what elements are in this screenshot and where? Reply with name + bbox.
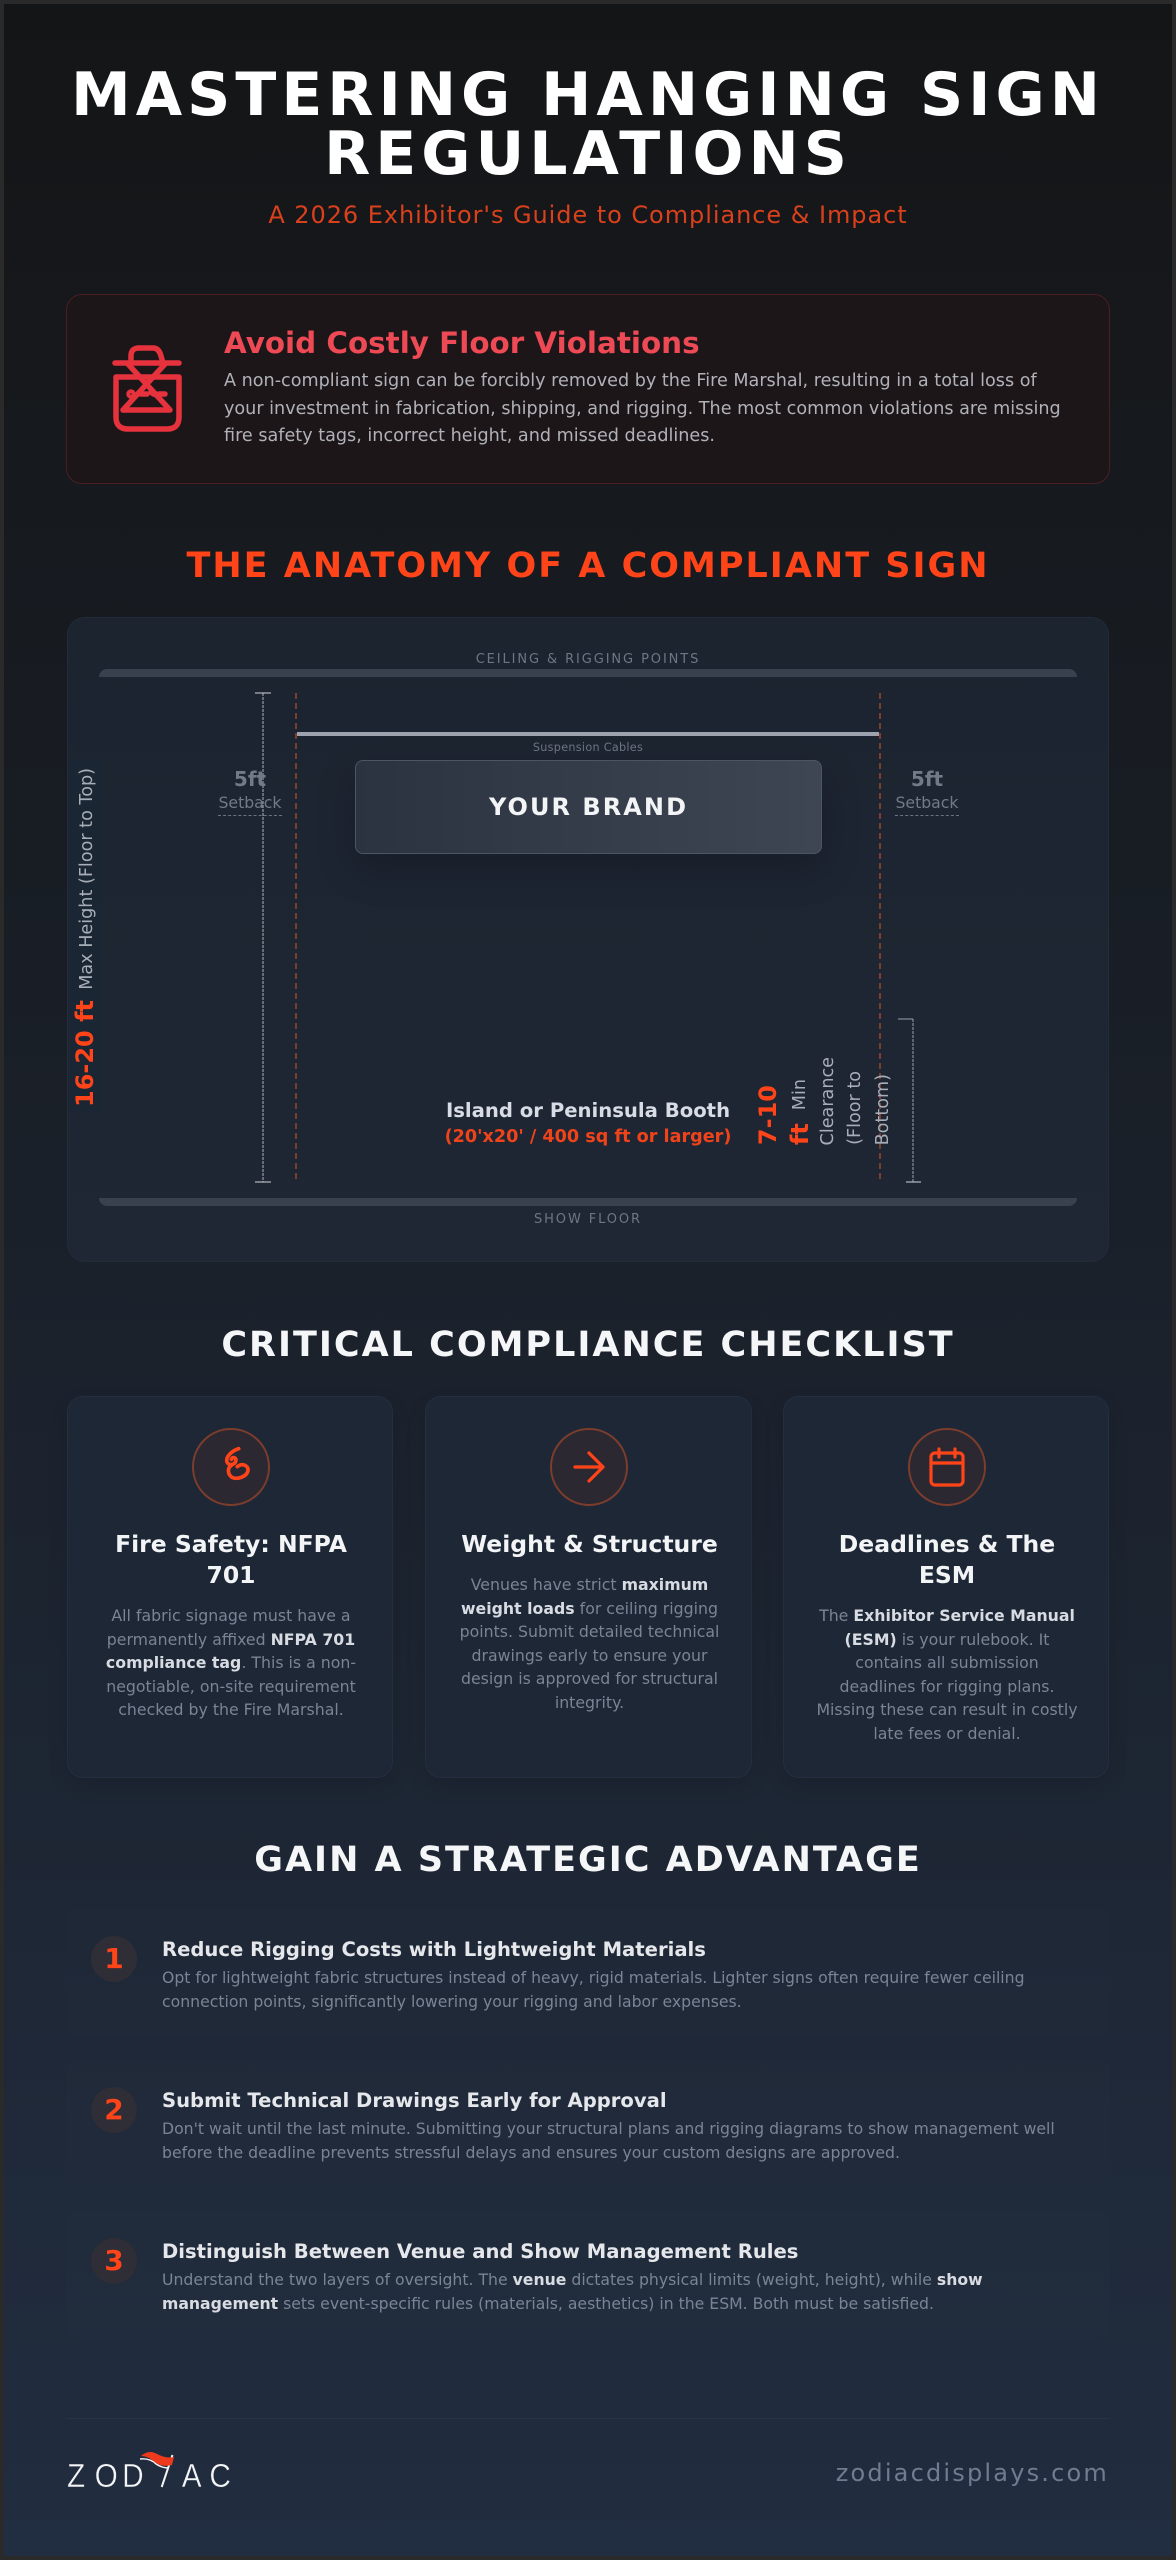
alert body text: fire safety tags, incorrect height, and missed deadlines.: [224, 426, 715, 446]
item background: [66, 2059, 1110, 2187]
card title: ESM: [919, 1561, 975, 1589]
measurement and setback lines: [255, 692, 921, 1182]
card text: late fees or denial.: [873, 1724, 1021, 1742]
item text: management sets event-specific rules (materials, aesthetics) in the ESM. Both must be satisfied.: [162, 2294, 934, 2313]
item text: connection points, significantly lowering your rigging and labor expenses.: [162, 1992, 742, 2011]
card text: (ESM) is your rulebook. It: [845, 1630, 1049, 1648]
max height caption: Max Height (Floor to Top): [77, 768, 97, 990]
caption: Floor to: (Floor to: [845, 1071, 865, 1145]
card title: Deadlines & The: [839, 1530, 1055, 1558]
icon: calendar: [908, 1428, 986, 1506]
card text: contains all submission: [855, 1653, 1039, 1672]
panel: sign anatomy diagram: [67, 617, 1109, 1262]
left setback: [218, 766, 282, 816]
title: REGULATIONS: [324, 119, 852, 189]
item 1: lightweight materials: [91, 1936, 1025, 2011]
right setback: 5ft: [911, 767, 943, 791]
panel: fire safety card: [67, 1396, 393, 1778]
card text: compliance tag. This is a non-: [106, 1653, 356, 1672]
clearance value: ft: [786, 1123, 814, 1145]
number badge: [91, 1936, 137, 1982]
card title: [839, 1530, 1055, 1589]
card text: integrity.: [555, 1692, 624, 1712]
card text: points. Submit detailed technical: [460, 1622, 719, 1641]
alert body text: A non-compliant sign can be forcibly removed by the Fire Marshal, resulting in a total loss of: [224, 371, 1037, 391]
alert body text: your investment in fabrication, shipping, and rigging. The most common violations are missing: [224, 398, 1061, 418]
card text: checked by the Fire Marshal.: [118, 1700, 344, 1719]
alert body text: [224, 371, 1061, 446]
cable label: Suspension Cables: [533, 741, 643, 754]
diagram background: [67, 617, 1109, 1262]
card text: Venues have strict maximum: [471, 1575, 708, 1594]
icon: flame: [192, 1428, 270, 1506]
card text: The Exhibitor Service Manual: [819, 1606, 1075, 1625]
card text: design is approved for structural: [461, 1669, 718, 1688]
item background: [66, 1909, 1110, 2037]
booth type label: Island or Peninsula Booth: [446, 1099, 730, 1122]
caption: Min: Min: [790, 1079, 810, 1110]
number badge: 1: [104, 1942, 124, 1975]
number badge: [91, 2238, 137, 2284]
card title: 701: [206, 1561, 256, 1589]
item text: before the deadline prevents stressful delays and ensures your custom designs are approved.: [162, 2143, 900, 2162]
heading: strategic advantage: GAIN A STRATEGIC ADVANTAGE: [254, 1840, 922, 1880]
max height label: [70, 760, 101, 1112]
title: MASTERING HANGING SIGN: [71, 60, 1105, 130]
item text: [162, 1968, 1025, 2011]
card text: [460, 1575, 719, 1712]
item text: [162, 2270, 983, 2313]
card text: negotiable, on-site requirement: [106, 1676, 356, 1696]
card title: [115, 1530, 347, 1589]
heading: checklist: CRITICAL COMPLIANCE CHECKLIST: [221, 1325, 955, 1365]
booth size: (20'x20' / 400 sq ft or larger): [445, 1127, 731, 1147]
min clearance label: [754, 1057, 893, 1145]
clearance value: 7-10: [754, 1085, 782, 1145]
panel: deadlines card: [783, 1396, 1109, 1778]
card title: Weight & Structure: [461, 1530, 718, 1558]
right setback: [895, 766, 959, 816]
number badge: 2: [104, 2093, 124, 2126]
card text: drawings early to ensure your: [471, 1646, 708, 1664]
panel: violations alert: [66, 294, 1110, 484]
card text: deadlines for rigging plans.: [839, 1676, 1055, 1696]
floor label: SHOW FLOOR: [534, 1212, 642, 1227]
logo: Zodiac: [67, 2452, 231, 2494]
left setback: Setback: [218, 793, 282, 812]
clearance value: [754, 1085, 814, 1145]
suspension cable: [297, 732, 879, 736]
left setback: 5ft: [234, 767, 266, 791]
ceiling bar: [99, 669, 1077, 677]
card text: Missing these can result in costly: [816, 1700, 1078, 1719]
caption: Bottom: Bottom): [873, 1074, 893, 1145]
title: [71, 60, 1105, 189]
caption: Clearance: Clearance: [818, 1057, 838, 1145]
number badge: 3: [104, 2244, 124, 2277]
card text: [106, 1606, 356, 1719]
number badge: [91, 2087, 137, 2133]
footer website: zodiacdisplays.com: [836, 2459, 1109, 2487]
item title: Distinguish Between Venue and Show Management Rules: [162, 2240, 798, 2263]
card text: weight loads for ceiling rigging: [461, 1598, 718, 1618]
logo: Zodiac: ZOD: [67, 2456, 144, 2494]
alert heading: Avoid Costly Floor Violations: [224, 326, 700, 360]
item background: [66, 2210, 1110, 2338]
item text: [162, 2119, 1055, 2162]
card text: [816, 1606, 1078, 1742]
right setback: Setback: [895, 793, 959, 812]
panel: weight card: [425, 1396, 752, 1778]
item text: Understand the two layers of oversight. The venue dictates physical limits (weight, height), while show: [162, 2270, 983, 2289]
max height value: 16-20 ft: [71, 1000, 99, 1107]
item title: Submit Technical Drawings Early for Approval: [162, 2089, 667, 2112]
item text: Opt for lightweight fabric structures instead of heavy, rigid materials. Lighter signs often require fewer ceiling: [162, 1968, 1025, 1987]
heading: anatomy: THE ANATOMY OF A COMPLIANT SIGN: [186, 546, 990, 586]
card text: All fabric signage must have a: [111, 1606, 351, 1625]
logo: Zodiac: AC: [182, 2456, 231, 2494]
hanging sign: [355, 760, 822, 854]
footer divider: [66, 2418, 1110, 2419]
icon: arrow: [550, 1428, 628, 1506]
item text: Don't wait until the last minute. Submitting your structural plans and rigging diagrams to show management well: [162, 2119, 1055, 2138]
card text: permanently affixed NFPA 701: [107, 1630, 355, 1648]
ceiling label: CEILING & RIGGING POINTS: [476, 652, 700, 667]
card title: Fire Safety: NFPA: [115, 1530, 347, 1558]
floor bar: [99, 1198, 1077, 1206]
subtitle: A 2026 Exhibitor's Guide to Compliance & Impact: [268, 201, 908, 229]
icon: crossed-out fire extinguisher: [112, 345, 182, 432]
hanging sign: YOUR BRAND: [489, 793, 688, 821]
item title: Reduce Rigging Costs with Lightweight Materials: [162, 1938, 706, 1961]
